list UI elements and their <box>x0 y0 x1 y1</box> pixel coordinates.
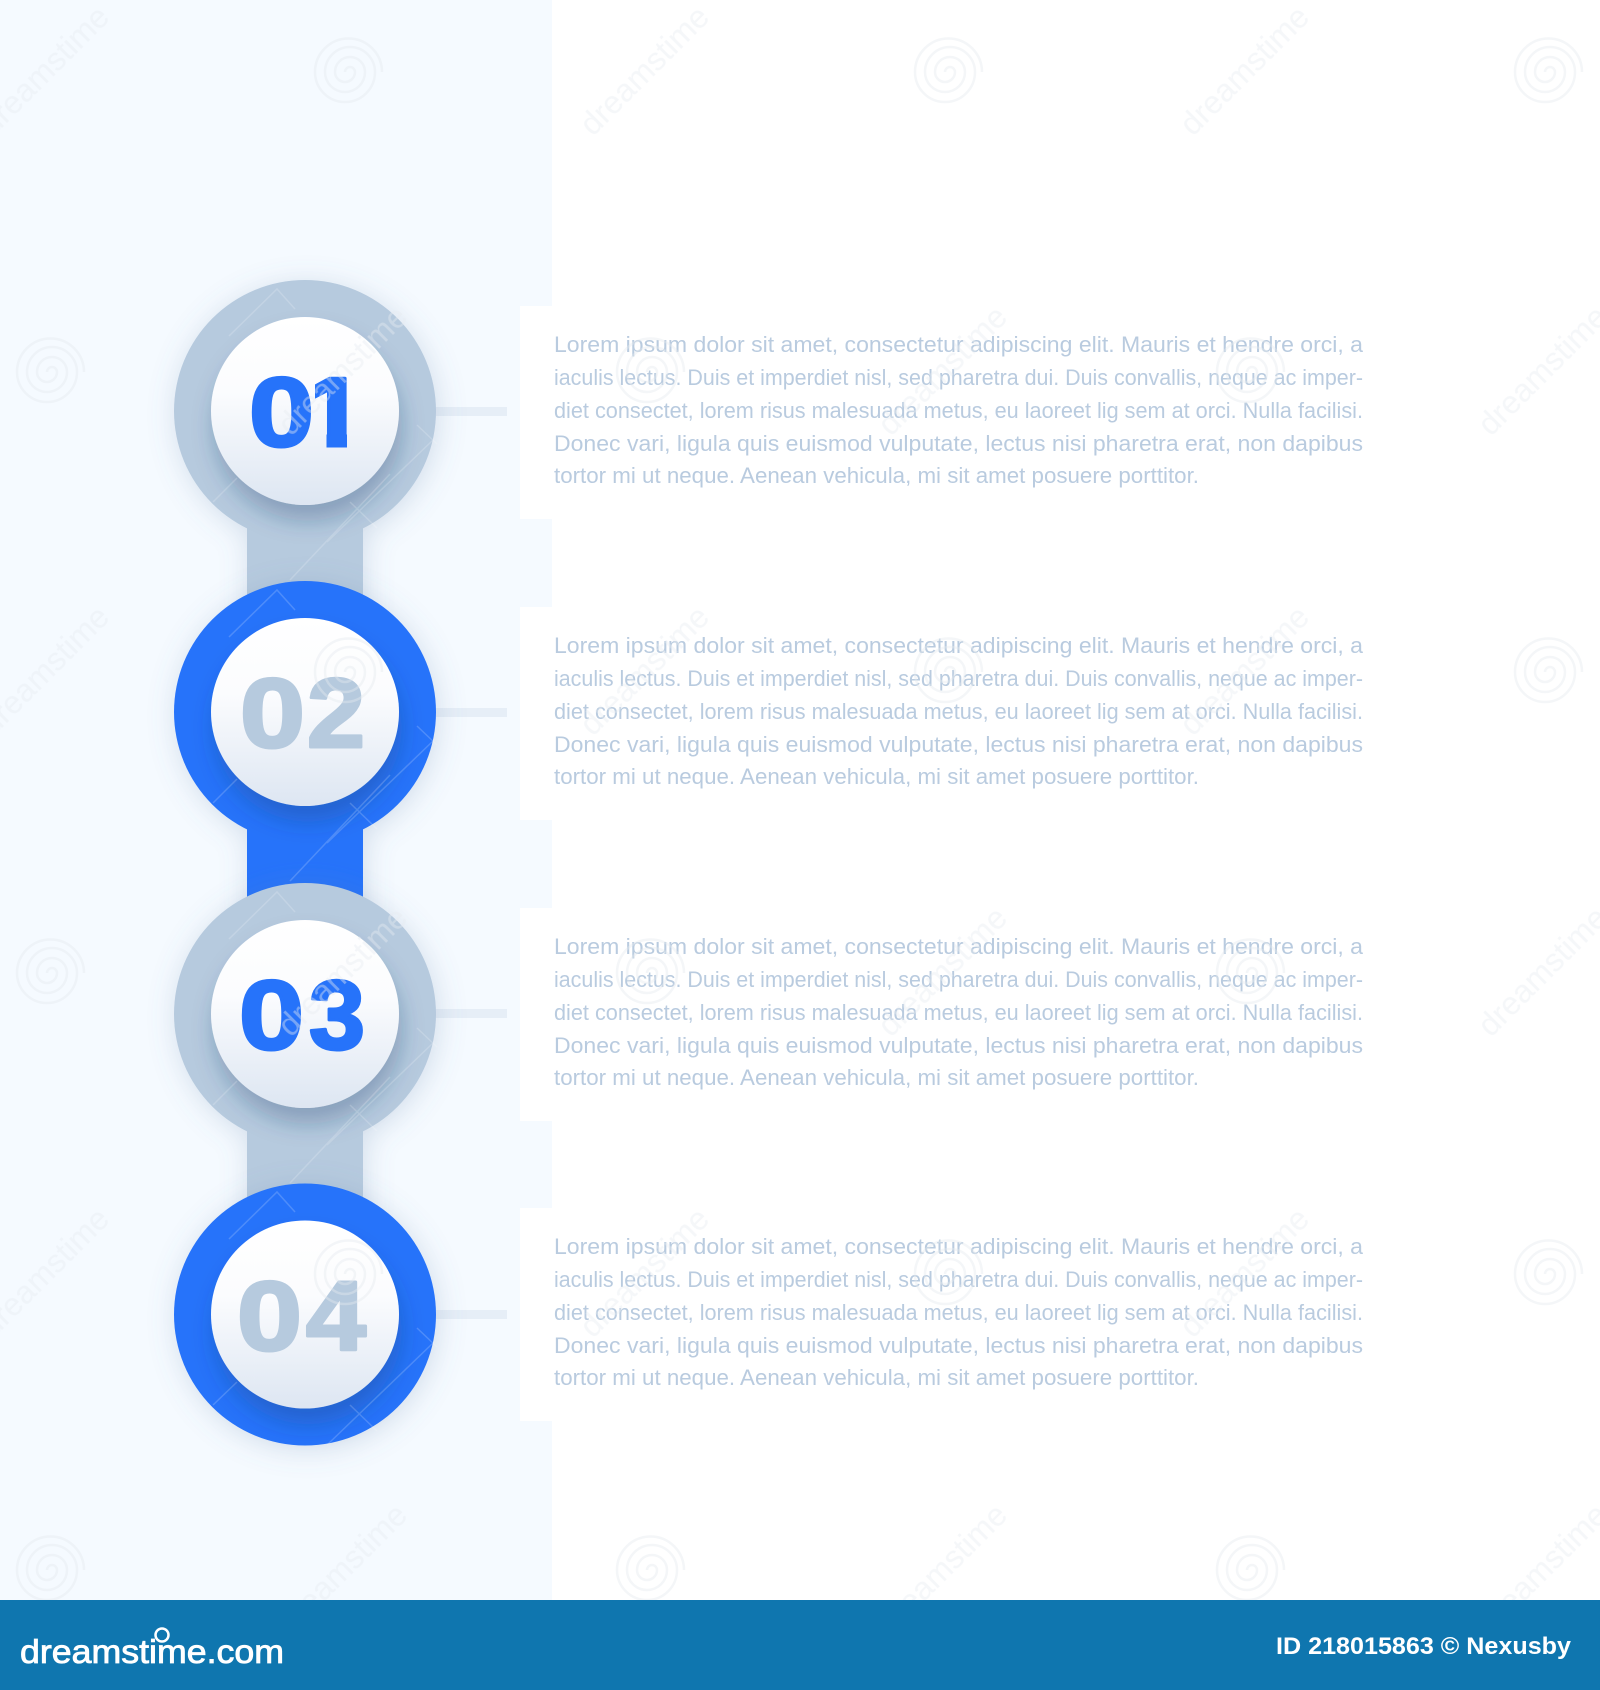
step 04: ring, knob and number: 4 <box>306 1261 366 1371</box>
step 03: ring, stem, knob and number: 0 <box>239 960 304 1070</box>
text block 04: Lorem ipsum dolor sit amet, consectetur adipiscing elit. Mauris et hendre orci, a <box>554 1234 1364 1259</box>
footer bar <box>0 1600 1600 1690</box>
text block 01: diet consectet, lorem risus malesuada metus, eu laoreet lig sem at orci. Nulla facilisi. <box>554 398 1363 423</box>
text block 03 <box>554 934 1364 1090</box>
step 01: ring, stem, knob and number: 0 <box>249 357 314 467</box>
text block 01 <box>554 332 1364 488</box>
watermark crossing lines over the circles <box>213 289 437 1445</box>
watermark diagonal wordmarks: dreamstime <box>1172 1200 1316 1344</box>
text block 02: Donec vari, ligula quis euismod vulputate, lectus nisi pharetra erat, non dapibus <box>554 732 1363 757</box>
text block 03: Lorem ipsum dolor sit amet, consectetur adipiscing elit. Mauris et hendre orci, a <box>554 934 1364 959</box>
text block 04: tortor mi ut neque. Aenean vehicula, mi sit amet posuere porttitor. <box>554 1365 1199 1390</box>
text block 03: tortor mi ut neque. Aenean vehicula, mi sit amet posuere porttitor. <box>554 1065 1199 1090</box>
step 03: ring, stem, knob and number: 3 <box>309 960 365 1070</box>
watermark diagonal wordmarks: dreamstime <box>270 298 414 442</box>
footer bar: ID 218015863 © Nexusby <box>1276 1633 1572 1660</box>
step 02: ring, stem, knob and number: 2 <box>307 658 365 768</box>
watermark diagonal wordmarks: dreamstime <box>270 1496 414 1640</box>
white text tabs overlapping the panel <box>520 306 552 1421</box>
step 03: ring, stem, knob and number <box>174 883 436 1220</box>
text block 04: diet consectet, lorem risus malesuada metus, eu laoreet lig sem at orci. Nulla facilisi. <box>554 1300 1363 1325</box>
watermark diagonal wordmarks: dreamstime <box>270 899 414 1043</box>
text block 01: iaculis lectus. Duis et imperdiet nisl, sed pharetra dui. Duis convallis, neque ac imper- <box>554 365 1363 390</box>
text block 01: tortor mi ut neque. Aenean vehicula, mi sit amet posuere porttitor. <box>554 463 1199 488</box>
watermark diagonal wordmarks: dreamstime <box>572 0 716 142</box>
text block 02: tortor mi ut neque. Aenean vehicula, mi sit amet posuere porttitor. <box>554 764 1199 789</box>
watermark diagonal wordmarks: dreamstime <box>870 1496 1014 1640</box>
text block 01: Lorem ipsum dolor sit amet, consectetur adipiscing elit. Mauris et hendre orci, a <box>554 332 1364 357</box>
text block 03: diet consectet, lorem risus malesuada metus, eu laoreet lig sem at orci. Nulla facilisi. <box>554 1000 1363 1025</box>
text block 04: iaculis lectus. Duis et imperdiet nisl, sed pharetra dui. Duis convallis, neque ac imper- <box>554 1267 1363 1292</box>
watermark diagonal wordmarks: dreamstime <box>870 298 1014 442</box>
step 01: ring, stem, knob and number: 1 <box>302 357 366 467</box>
footer bar: dreamstime.com <box>20 1633 284 1670</box>
watermark diagonal wordmarks: dreamstime <box>1172 598 1316 742</box>
step 04: ring, knob and number: 0 <box>237 1261 302 1371</box>
text block 03: Donec vari, ligula quis euismod vulputate, lectus nisi pharetra erat, non dapibus <box>554 1033 1363 1058</box>
text block 04 <box>554 1234 1364 1390</box>
text block 02: iaculis lectus. Duis et imperdiet nisl, sed pharetra dui. Duis convallis, neque ac imper- <box>554 666 1363 691</box>
text block 03: iaculis lectus. Duis et imperdiet nisl, sed pharetra dui. Duis convallis, neque ac imper- <box>554 967 1363 992</box>
text block 02: diet consectet, lorem risus malesuada metus, eu laoreet lig sem at orci. Nulla facilisi. <box>554 699 1363 724</box>
step 02: ring, stem, knob and number: 0 <box>240 658 305 768</box>
watermark diagonal wordmarks: dreamstime <box>1172 0 1316 142</box>
step 01: ring, stem, knob and number <box>174 280 436 620</box>
text block 02 <box>554 633 1364 789</box>
watermark diagonal wordmarks: dreamstime <box>572 1200 716 1344</box>
step 02: ring, stem, knob and number <box>174 581 436 920</box>
watermark diagonal wordmarks: dreamstime <box>870 899 1014 1043</box>
text block 02: Lorem ipsum dolor sit amet, consectetur adipiscing elit. Mauris et hendre orci, a <box>554 633 1364 658</box>
left background panel <box>0 0 552 1600</box>
watermark diagonal wordmarks: dreamstime <box>572 598 716 742</box>
text block 01: Donec vari, ligula quis euismod vulputate, lectus nisi pharetra erat, non dapibus <box>554 431 1363 456</box>
step 04: ring, knob and number <box>174 1184 436 1446</box>
connector lines from circles to text <box>430 407 507 1319</box>
text block 04: Donec vari, ligula quis euismod vulputate, lectus nisi pharetra erat, non dapibus <box>554 1333 1363 1358</box>
